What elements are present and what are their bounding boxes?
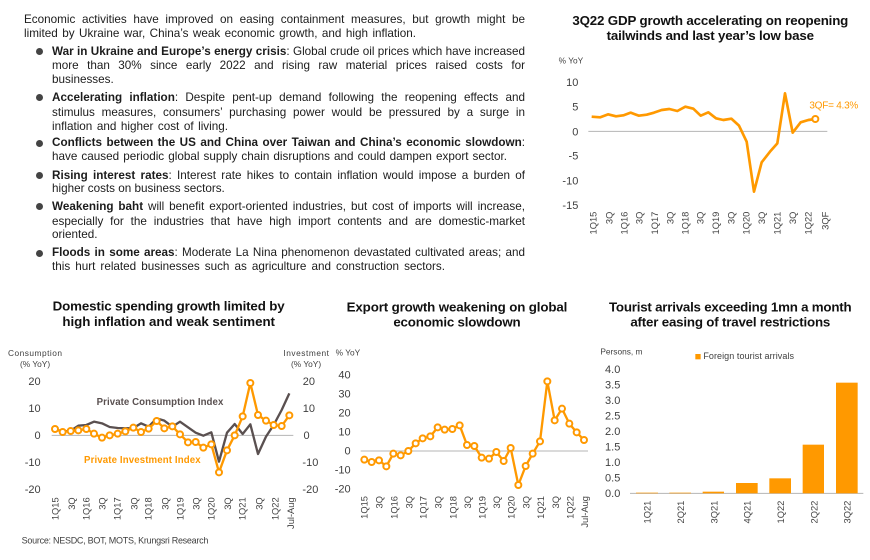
marker: 3QF point [812, 116, 818, 122]
label: private investment index: Private Investment Index [84, 455, 201, 466]
right axis: 20 [303, 376, 315, 388]
callout: 3QF value: 3QF= 4.3% [809, 101, 858, 112]
left axis: (% YoY) [20, 359, 50, 369]
x axis labels [643, 501, 853, 523]
x axis labels: 3Q [696, 212, 706, 224]
bullet: accelerating inflation: Accelerating inflation: Despite pent-up demand following the reopening effects and [52, 91, 525, 104]
x axis labels: 1Q19 [711, 212, 721, 234]
x axis labels: 3Q [521, 496, 531, 508]
y axis [559, 55, 584, 212]
left axis: Consumption [8, 348, 62, 358]
x axis labels: 3Q [254, 497, 264, 510]
heading: GDP growth: 3Q22 GDP growth accelerating on reopening [572, 13, 848, 28]
y axis: % YoY [336, 348, 361, 358]
y axis [600, 347, 643, 500]
heading: tourist arrivals [609, 300, 852, 330]
left axis [8, 348, 62, 496]
bullet: war in Ukraine: businesses. [52, 73, 114, 86]
x axis labels: 1Q15 [589, 212, 599, 234]
x axis labels: 1Q20 [507, 496, 517, 519]
y axis: 20 [338, 408, 351, 420]
x axis labels: 1Q19 [175, 497, 185, 520]
x axis labels: 1Q21 [773, 212, 783, 234]
bullet: floods [36, 246, 525, 273]
x axis labels: 2Q22 [809, 501, 819, 523]
x axis labels: 3Q [98, 497, 108, 510]
y axis: -10 [335, 465, 351, 477]
y axis: 1.0 [605, 457, 620, 469]
panel: tourist arrivals chart [600, 300, 864, 524]
x axis labels: 3Q [223, 497, 233, 510]
x axis labels: 3Q [404, 496, 414, 508]
x axis labels: 3QF [820, 211, 830, 230]
x axis labels: 3Q [635, 212, 645, 224]
x axis labels: 2Q21 [676, 501, 686, 523]
x axis labels: 1Q17 [650, 212, 660, 234]
x axis labels: 3Q [665, 212, 675, 224]
heading: tourist arrivals: Tourist arrivals exceeding 1mn a month [609, 300, 852, 315]
line: private investment [52, 380, 292, 475]
y axis: 5 [572, 102, 578, 114]
x axis labels: 3Q [492, 496, 502, 508]
intro text: Economic activities have improved on easing containment measures, but growth might be [24, 13, 525, 26]
x axis labels: 1Q19 [478, 496, 488, 519]
bullet: war in Ukraine [36, 45, 525, 86]
y axis: 40 [338, 370, 351, 382]
x axis labels [360, 496, 590, 528]
legend: Foreign tourist arrivals [703, 351, 794, 361]
x axis labels: 1Q18 [448, 496, 458, 519]
x axis labels: 4Q21 [743, 501, 753, 523]
y axis: -20 [335, 484, 351, 496]
x axis labels [50, 497, 296, 529]
line: private consumption [55, 393, 289, 462]
x axis labels: 1Q15 [50, 497, 60, 520]
y axis: -10 [562, 175, 578, 187]
y axis: % YoY [559, 55, 584, 65]
bullet: US-China conflicts: Conflicts between the US and China over Taiwan and China’s economic slowdown: [52, 136, 525, 149]
bullet: war in Ukraine: War in Ukraine and Europe’s energy crisis: Global crude oil prices which have increased [52, 45, 525, 58]
bullet: weakening baht: Weakening baht will benefit export-oriented industries, but cost of imports will increase, [52, 200, 525, 213]
heading: domestic spending [53, 299, 285, 329]
bars: foreign tourist arrivals [636, 383, 858, 493]
x axis labels: 1Q16 [81, 497, 91, 520]
line: export growth [361, 378, 587, 488]
label: private consumption index: Private Consumption Index [97, 397, 224, 408]
y axis [335, 348, 361, 496]
y axis: 3.5 [605, 380, 620, 392]
intro text [24, 13, 525, 40]
x axis labels: 1Q21 [238, 497, 248, 520]
right axis: Investment [283, 348, 330, 358]
x axis labels: 3Q [551, 496, 561, 508]
x axis labels: 1Q22 [565, 496, 575, 519]
y axis: Persons, m [600, 347, 643, 357]
x axis labels: 1Q22 [776, 501, 786, 523]
x axis labels: 3Q [67, 497, 77, 510]
heading: GDP growth: tailwinds and last year’s low base [607, 28, 814, 43]
x axis labels: 3Q [726, 212, 736, 224]
bullet: accelerating inflation: inflation and higher cost of living. [52, 120, 228, 133]
x axis labels: 1Q15 [360, 496, 370, 519]
y axis: 30 [338, 389, 351, 401]
x axis labels: 3Q [191, 497, 201, 510]
y axis: 0 [572, 126, 578, 138]
heading: export growth: economic slowdown [393, 315, 521, 330]
bullet: weakening baht: especially for the industries that have high import contents and are domestic-market [52, 215, 525, 228]
line: GDP growth [592, 93, 815, 192]
bullet: rising interest rates [36, 169, 525, 195]
x axis labels: 3Q [375, 496, 385, 508]
y axis: 10 [566, 77, 578, 89]
left axis: 0 [35, 430, 41, 442]
y axis: 4.0 [605, 364, 620, 376]
panel: export growth chart [335, 300, 590, 528]
y axis: -15 [562, 200, 578, 212]
y axis: 3.0 [605, 395, 620, 407]
bullet: rising interest rates: Rising interest rates: Interest rate hikes to contain inflation would impose a burden of [52, 169, 525, 182]
panel: GDP growth chart [558, 13, 858, 234]
x axis labels: 1Q20 [742, 212, 752, 234]
y axis: 10 [338, 427, 351, 439]
heading: export growth: Export growth weakening on global [347, 300, 567, 315]
x axis labels: 3Q [129, 497, 139, 510]
left axis: 10 [28, 403, 41, 415]
right axis: -20 [302, 484, 318, 496]
right axis: 10 [303, 403, 315, 415]
x axis labels: 1Q21 [536, 496, 546, 519]
source note: Source: NESDC, BOT, MOTS, Krungsri Research [22, 536, 208, 546]
x axis labels: 1Q22 [270, 497, 280, 520]
x axis labels: 1Q16 [619, 212, 629, 234]
bullet: floods: this hurt related businesses such as agriculture and construction sectors. [52, 260, 445, 273]
bullet: weakening baht: oriented. [52, 228, 97, 241]
x axis labels: 1Q17 [419, 496, 429, 519]
x axis labels: 1Q17 [113, 497, 123, 520]
bullet: rising interest rates: higher costs on business sectors. [52, 182, 225, 195]
x axis labels: 1Q20 [207, 497, 217, 520]
bullet: US-China conflicts: have caused periodic global supply chain disruptions and could dampen export sector. [52, 150, 507, 163]
heading: domestic spending: Domestic spending growth limited by [53, 299, 285, 314]
heading: tourist arrivals: after easing of travel restrictions [630, 315, 830, 330]
panel: domestic spending chart [8, 299, 330, 546]
x axis labels: Jul-Aug [580, 496, 590, 528]
y axis: 2.0 [605, 426, 620, 438]
x axis labels: 3Q [788, 212, 798, 224]
right axis: (% YoY) [291, 359, 321, 369]
x axis labels: 1Q22 [804, 212, 814, 234]
y axis: -5 [569, 151, 578, 163]
bullet: floods: Floods in some areas: Moderate La Nina phenomenon devastated cultivated areas; and [52, 246, 525, 259]
panel: economic commentary [24, 13, 525, 273]
y axis: 0.5 [605, 473, 620, 485]
left axis: -20 [25, 484, 41, 496]
heading: domestic spending: high inflation and weak sentiment [62, 314, 276, 329]
x axis labels: 3Q [434, 496, 444, 508]
y axis: 2.5 [605, 411, 620, 423]
right axis: -10 [302, 457, 318, 469]
x axis labels: 1Q18 [144, 497, 154, 520]
x axis labels: 1Q21 [643, 501, 653, 523]
x axis labels: 1Q18 [680, 212, 690, 234]
x axis labels: Jul-Aug [286, 497, 296, 529]
heading: export growth [347, 300, 567, 330]
bullet: US-China conflicts [36, 136, 525, 163]
y axis: 1.5 [605, 442, 620, 454]
x axis labels: 3Q [160, 497, 170, 510]
x axis labels: 3Q21 [709, 501, 719, 523]
bullet: weakening baht [36, 200, 525, 241]
left axis: -10 [25, 457, 41, 469]
x axis labels: 3Q22 [843, 501, 853, 523]
y axis: 0 [345, 446, 351, 458]
bullet: war in Ukraine: more than 30% since early 2022 and rising raw material prices raised costs for [52, 59, 525, 72]
intro text: limited by Ukraine war, China’s weak economic growth, and high inflation. [24, 27, 416, 40]
x axis labels: 3Q [604, 212, 614, 224]
right axis [283, 348, 330, 496]
heading: GDP growth [572, 13, 848, 43]
x axis labels [589, 211, 830, 234]
bullet: accelerating inflation [36, 91, 525, 133]
x axis labels: 3Q [757, 212, 767, 224]
right axis: 0 [304, 430, 310, 442]
x axis labels: 3Q [463, 496, 473, 508]
bullet: accelerating inflation: stimulus measures, consumers’ purchasing power would be pressured by a surge in [52, 106, 525, 119]
left axis: 20 [28, 376, 41, 388]
y axis: 0.0 [605, 488, 620, 500]
x axis labels: 1Q16 [389, 496, 399, 519]
